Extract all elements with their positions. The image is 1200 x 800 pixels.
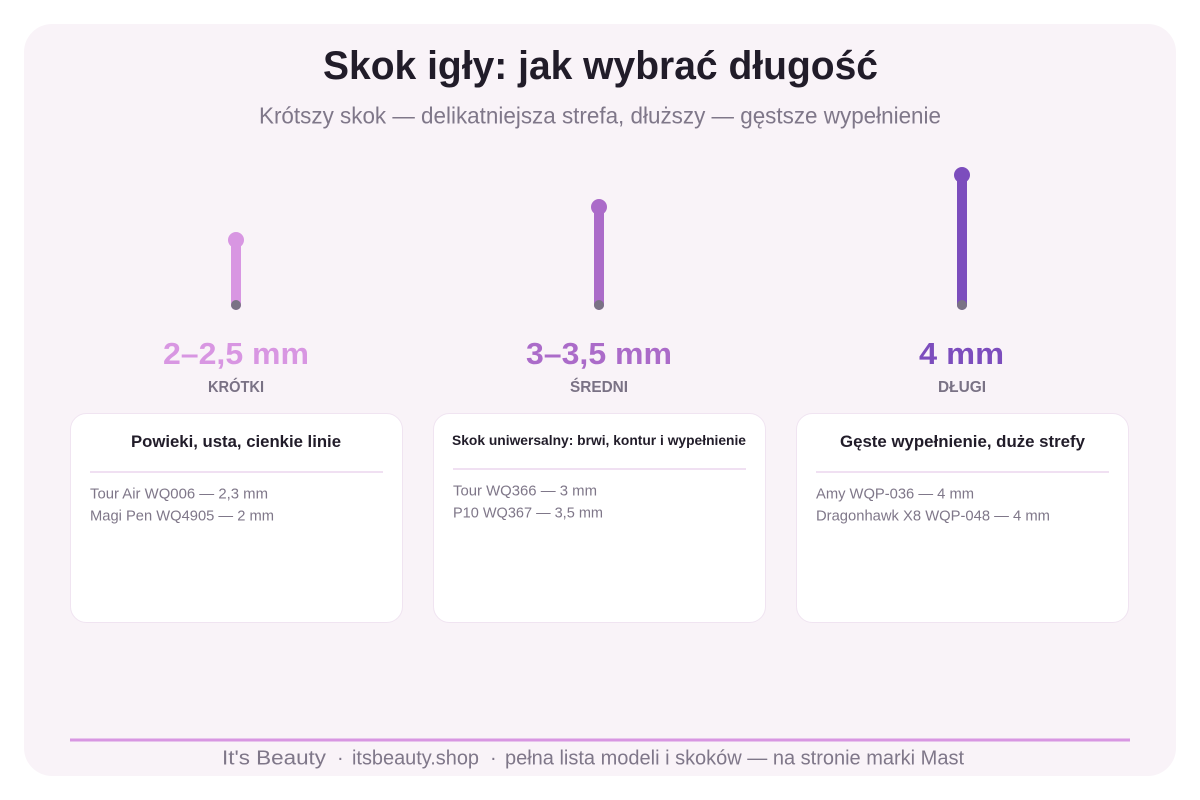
footer text: ·: [337, 748, 344, 770]
footer text: ·: [490, 748, 497, 770]
column: medium stroke: [434, 199, 766, 622]
value: short: 2–2,5 mm: [163, 336, 309, 371]
value: long: 4 mm: [919, 336, 1004, 371]
card models: Dragonhawk X8 WQP-048 — 4 mm: [816, 508, 1050, 524]
icon: short needle: [228, 232, 244, 310]
card models: Tour Air WQ006 — 2,3 mm: [90, 486, 268, 502]
card: long: [796, 414, 1128, 622]
card: medium: [434, 414, 766, 622]
card models: [90, 486, 274, 524]
footer text: itsbeauty.shop: [352, 748, 479, 770]
card: short: [70, 414, 402, 622]
footer text: pełna lista modeli i skoków — na stronie marki Mast: [505, 748, 964, 770]
title: Skok igły: jak wybrać długość: [323, 44, 878, 88]
footer rule: [70, 738, 1130, 742]
value: medium: 3–3,5 mm: [526, 336, 672, 371]
column: short stroke: [70, 232, 402, 622]
label: medium: ŚREDNI: [570, 377, 628, 396]
card models: Amy WQP-036 — 4 mm: [816, 486, 974, 502]
subtitle: Krótszy skok — delikatniejsza strefa, dłuższy — gęstsze wypełnienie: [259, 102, 941, 128]
icon: long needle: [954, 167, 970, 310]
column: long stroke: [796, 167, 1128, 622]
label: long: DŁUGI: [938, 379, 986, 396]
card models: [816, 486, 1050, 524]
label: short: KRÓTKI: [208, 377, 264, 396]
icon: medium needle: [591, 199, 607, 310]
card heading: Powieki, usta, cienkie linie: [131, 432, 341, 451]
footer text: [222, 748, 964, 770]
card models: Tour WQ366 — 3 mm: [453, 482, 597, 500]
footer text: It's Beauty: [222, 748, 326, 770]
card heading: Skok uniwersalny: brwi, kontur i wypełnienie: [452, 432, 746, 448]
card models: [453, 482, 603, 522]
card heading: Gęste wypełnienie, duże strefy: [840, 432, 1086, 451]
card models: Magi Pen WQ4905 — 2 mm: [90, 508, 274, 524]
card models: P10 WQ367 — 3,5 mm: [453, 504, 603, 522]
